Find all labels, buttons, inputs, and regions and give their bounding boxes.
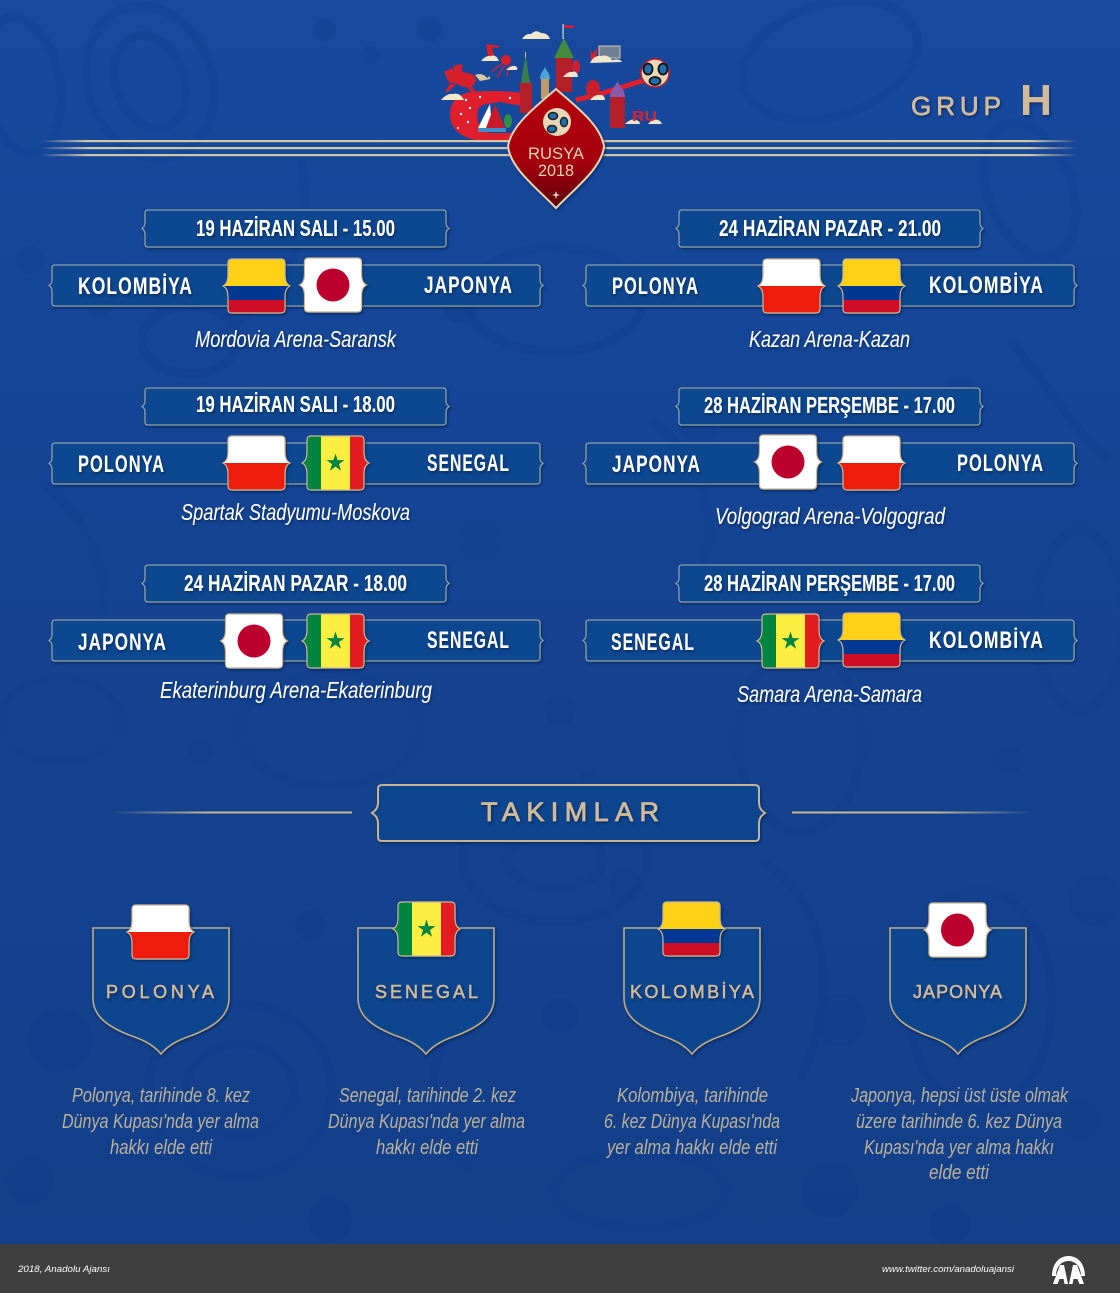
- match: Japonya - Polonya: [583, 388, 1077, 529]
- egg: [586, 80, 600, 98]
- heading: group H: H: [1020, 76, 1052, 125]
- goal and goalkeeper: [590, 46, 620, 60]
- badge text: RUSYA: [528, 144, 585, 163]
- date banner: [142, 565, 449, 602]
- flag: Japan: [754, 435, 824, 489]
- description: [328, 1084, 525, 1159]
- venue: Spartak Stadyumu-Moskova: [181, 499, 410, 525]
- flag: Japan: [298, 258, 368, 312]
- team card: Polonya: [62, 905, 259, 1159]
- ribbon dots: [457, 96, 511, 129]
- date text: 19 HAZİRAN SALI - 15.00: [196, 215, 395, 241]
- flag: Senegal: [301, 436, 371, 490]
- flag: Senegal: [756, 614, 826, 668]
- date banner: [676, 210, 983, 247]
- football: [641, 59, 669, 87]
- flag: Poland: [222, 436, 292, 490]
- description: Dünya Kupası'nda yer alma: [62, 1110, 259, 1133]
- flag: Colombia: [222, 259, 292, 313]
- green tower: [554, 24, 575, 92]
- RU wordmark: RU: [632, 108, 657, 125]
- shield label: SENEGAL: [375, 982, 478, 1002]
- team bar: [49, 443, 543, 484]
- date banner: [142, 210, 449, 247]
- match: Kolombiya - Japonya: [49, 210, 543, 352]
- team right: SENEGAL: [427, 450, 510, 477]
- left tower: [520, 52, 532, 113]
- venue: Volgograd Arena-Volgograd: [715, 503, 946, 529]
- team right: POLONYA: [957, 450, 1044, 477]
- shield: [358, 928, 494, 1054]
- description: Senegal, tarihinde 2. kez: [339, 1084, 516, 1107]
- description: Kupası'nda yer alma hakkı: [864, 1136, 1054, 1159]
- twitter url: www.twitter.com/anadoluajansi: [882, 1264, 1015, 1275]
- team bar: [583, 620, 1077, 661]
- team right: JAPONYA: [424, 272, 513, 299]
- team bar: [583, 265, 1077, 306]
- description: hakkı elde etti: [110, 1136, 213, 1159]
- badge text: [528, 144, 585, 180]
- team left: KOLOMBİYA: [78, 273, 193, 300]
- team bar: [49, 620, 543, 661]
- red ribbon loop: [450, 91, 522, 140]
- flag: Colombia: [837, 259, 907, 313]
- shield: [624, 928, 760, 1054]
- illustration: Russian landmarks and mascots: [441, 24, 669, 140]
- team card: Japonya: [850, 903, 1069, 1184]
- description: Dünya Kupası'nda yer alma: [328, 1110, 525, 1133]
- team left: JAPONYA: [78, 629, 167, 656]
- team card: Senegal: [328, 902, 525, 1159]
- description: 6. kez Dünya Kupası'nda: [604, 1110, 780, 1133]
- match: Senegal - Kolombiya: [583, 565, 1077, 707]
- team bar: [583, 443, 1077, 484]
- date text: 24 HAZİRAN PAZAR - 18.00: [184, 570, 407, 596]
- description: [604, 1084, 780, 1159]
- flag: Poland: [757, 259, 827, 313]
- flag: Poland: [837, 436, 907, 490]
- shield label: JAPONYA: [913, 982, 1002, 1002]
- copyright: 2018, Anadolu Ajansı: [17, 1264, 110, 1275]
- date text: 28 HAZİRAN PERŞEMBE - 17.00: [704, 570, 955, 596]
- footer: [0, 1244, 1120, 1293]
- flag: Senegal: [301, 614, 371, 668]
- shield: [93, 928, 229, 1054]
- team left: SENEGAL: [611, 629, 695, 656]
- heading: group H: GRUP: [911, 91, 1001, 121]
- match: Japonya - Senegal: [49, 565, 543, 703]
- clouds: [441, 31, 662, 124]
- description: elde etti: [929, 1161, 990, 1184]
- team bar: [49, 265, 543, 306]
- flag: Senegal: [392, 902, 462, 956]
- emblem: Rusya 2018 badge: [508, 89, 604, 208]
- shield label: POLONYA: [106, 982, 214, 1002]
- date text: 24 HAZİRAN PAZAR - 21.00: [719, 215, 941, 241]
- flag: Colombia: [657, 902, 727, 956]
- team left: JAPONYA: [612, 451, 701, 478]
- description: Polonya, tarihinde 8. kez: [72, 1084, 250, 1107]
- heading: group H: [911, 76, 1052, 125]
- heading: Takımlar: TAKIMLAR: [481, 797, 659, 827]
- date banner: [142, 388, 449, 425]
- rocket: [486, 44, 511, 77]
- match: Polonya - Kolombiya: [583, 210, 1077, 352]
- venue: Samara Arena-Samara: [737, 681, 922, 707]
- date text: 28 HAZİRAN PERŞEMBE - 17.00: [704, 392, 955, 418]
- flag: Colombia: [837, 613, 907, 667]
- flag: Japan: [220, 614, 290, 668]
- team left: POLONYA: [612, 273, 699, 300]
- flag: Japan: [923, 903, 993, 957]
- date text: 19 HAZİRAN SALI - 18.00: [196, 391, 395, 417]
- badge text: 2018: [538, 161, 574, 180]
- description: [850, 1084, 1069, 1184]
- description: üzere tarihinde 6. kez Dünya: [856, 1110, 1062, 1133]
- venue: Ekaterinburg Arena-Ekaterinburg: [160, 677, 432, 703]
- date banner: [676, 388, 983, 425]
- venue: Mordovia Arena-Saransk: [195, 326, 397, 352]
- description: Japonya, hepsi üst üste olmak: [850, 1084, 1069, 1107]
- bird: [475, 74, 490, 81]
- flag: Poland: [126, 905, 196, 959]
- horses: [444, 64, 476, 93]
- team right: SENEGAL: [427, 627, 510, 654]
- ribbon to the ball: [576, 80, 645, 100]
- icon: AA logo: [1052, 1256, 1085, 1284]
- header rule lines: [40, 140, 1078, 156]
- matryoshka: [572, 60, 580, 74]
- heading: Takımlar: [112, 785, 1032, 841]
- badge logo: [543, 108, 571, 136]
- team right: KOLOMBİYA: [929, 272, 1044, 299]
- shield: [890, 928, 1026, 1054]
- date banner: [676, 565, 983, 602]
- venue: Kazan Arena-Kazan: [749, 326, 910, 352]
- team card: Kolombiya: [604, 902, 780, 1159]
- team left: POLONYA: [78, 451, 165, 478]
- badge star: [552, 191, 560, 199]
- match: Polonya - Senegal: [49, 388, 543, 525]
- description: Kolombiya, tarihinde: [617, 1084, 768, 1107]
- blue dome tower: [540, 66, 550, 99]
- description: hakkı elde etti: [376, 1136, 479, 1159]
- purple tower: [610, 80, 625, 128]
- shield label: KOLOMBİYA: [630, 982, 754, 1002]
- sails in the loop: [478, 104, 512, 132]
- description: yer alma hakkı elde etti: [605, 1136, 778, 1159]
- team right: KOLOMBİYA: [929, 627, 1044, 654]
- description: [62, 1084, 259, 1159]
